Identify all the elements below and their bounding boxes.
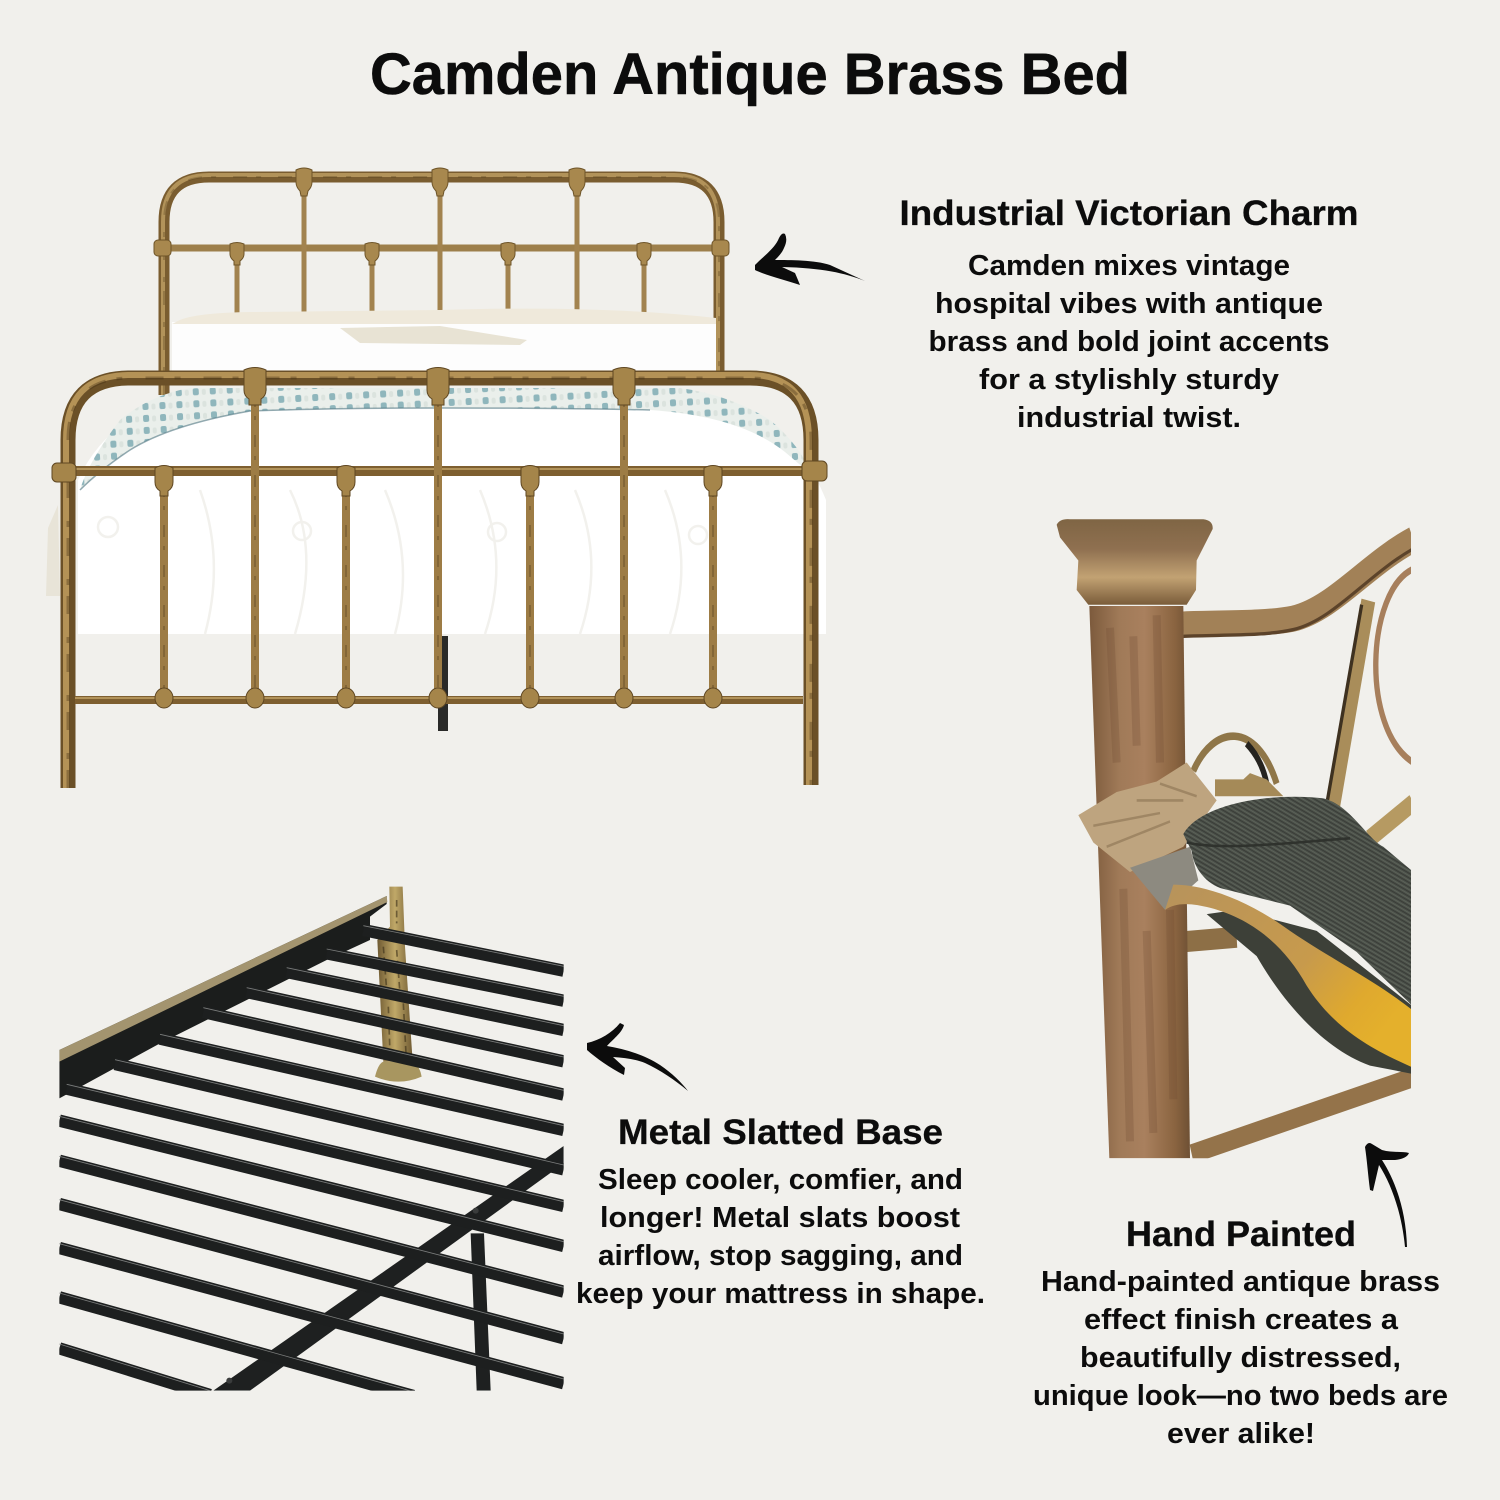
far post bbox=[377, 887, 413, 1062]
text block: Hand Painted description: beautifully distressed, bbox=[1080, 1342, 1401, 1374]
pillows bbox=[172, 309, 716, 380]
text block: Hand Painted description: Hand-painted antique brass bbox=[1041, 1266, 1440, 1298]
slat highlights bbox=[59, 926, 564, 1392]
text block: Industrial Victorian Charm description: industrial twist. bbox=[1017, 402, 1241, 434]
bolts bbox=[473, 1208, 479, 1214]
text block: Metal Slatted Base description bbox=[576, 1164, 985, 1310]
gloved hand bbox=[1183, 797, 1413, 1007]
text block: Industrial Victorian Charm description: Camden mixes vintage bbox=[968, 250, 1290, 282]
text block: Metal Slatted Base description: airflow, stop sagging, and bbox=[598, 1240, 963, 1272]
text block: Industrial Victorian Charm description: hospital vibes with antique bbox=[935, 288, 1323, 320]
arrow: pointing to slatted base bbox=[587, 1023, 688, 1091]
photo: hand painting the brass post bbox=[1057, 519, 1413, 1158]
text block: Hand Painted description bbox=[1033, 1266, 1448, 1450]
post bbox=[1089, 606, 1190, 1158]
text block: Industrial Victorian Charm description: brass and bold joint accents bbox=[928, 326, 1330, 358]
photo: metal slatted base bbox=[59, 887, 564, 1396]
text block: Industrial Victorian Charm description: for a stylishly sturdy bbox=[979, 364, 1279, 396]
metal clip behind hand bbox=[1215, 773, 1283, 796]
lower glove wrist bbox=[1207, 910, 1413, 1074]
heading: Hand Painted: Hand Painted bbox=[1126, 1215, 1356, 1254]
slats bbox=[59, 930, 564, 1396]
brush ferrule bbox=[1130, 847, 1198, 910]
headboard frame bbox=[154, 168, 729, 395]
illustration: brass bed front view bbox=[46, 168, 827, 788]
arrow: pointing to headboard bbox=[755, 234, 865, 285]
brush bristles bbox=[1078, 763, 1217, 872]
footboard frame bbox=[52, 368, 827, 788]
text block: Hand Painted description: effect finish creates a bbox=[1084, 1304, 1399, 1336]
brush handle bbox=[1165, 885, 1413, 1068]
text block: Hand Painted description: ever alike! bbox=[1167, 1418, 1315, 1450]
mattress and comforter bbox=[46, 388, 826, 731]
cross beam and leg bbox=[213, 1146, 564, 1391]
arrow: pointing to hand painted photo bbox=[1365, 1143, 1409, 1247]
post foot bbox=[375, 1062, 422, 1082]
top right rail and scrollwork bbox=[1183, 539, 1413, 1154]
text block: Hand Painted description: unique look—no two beds are bbox=[1033, 1380, 1448, 1412]
side rail bbox=[59, 896, 387, 1098]
text block: Metal Slatted Base description: longer! Metal slats boost bbox=[600, 1202, 960, 1234]
text block: Industrial Victorian Charm description bbox=[928, 250, 1330, 434]
post cap bbox=[1057, 519, 1213, 605]
heading: Industrial Victorian Charm: Industrial Victorian Charm bbox=[900, 194, 1358, 233]
title: Camden Antique Brass Bed bbox=[370, 42, 1130, 107]
heading: Metal Slatted Base: Metal Slatted Base bbox=[618, 1113, 943, 1152]
text block: Metal Slatted Base description: Sleep cooler, comfier, and bbox=[598, 1164, 963, 1196]
text block: Metal Slatted Base description: keep your mattress in shape. bbox=[576, 1278, 985, 1310]
